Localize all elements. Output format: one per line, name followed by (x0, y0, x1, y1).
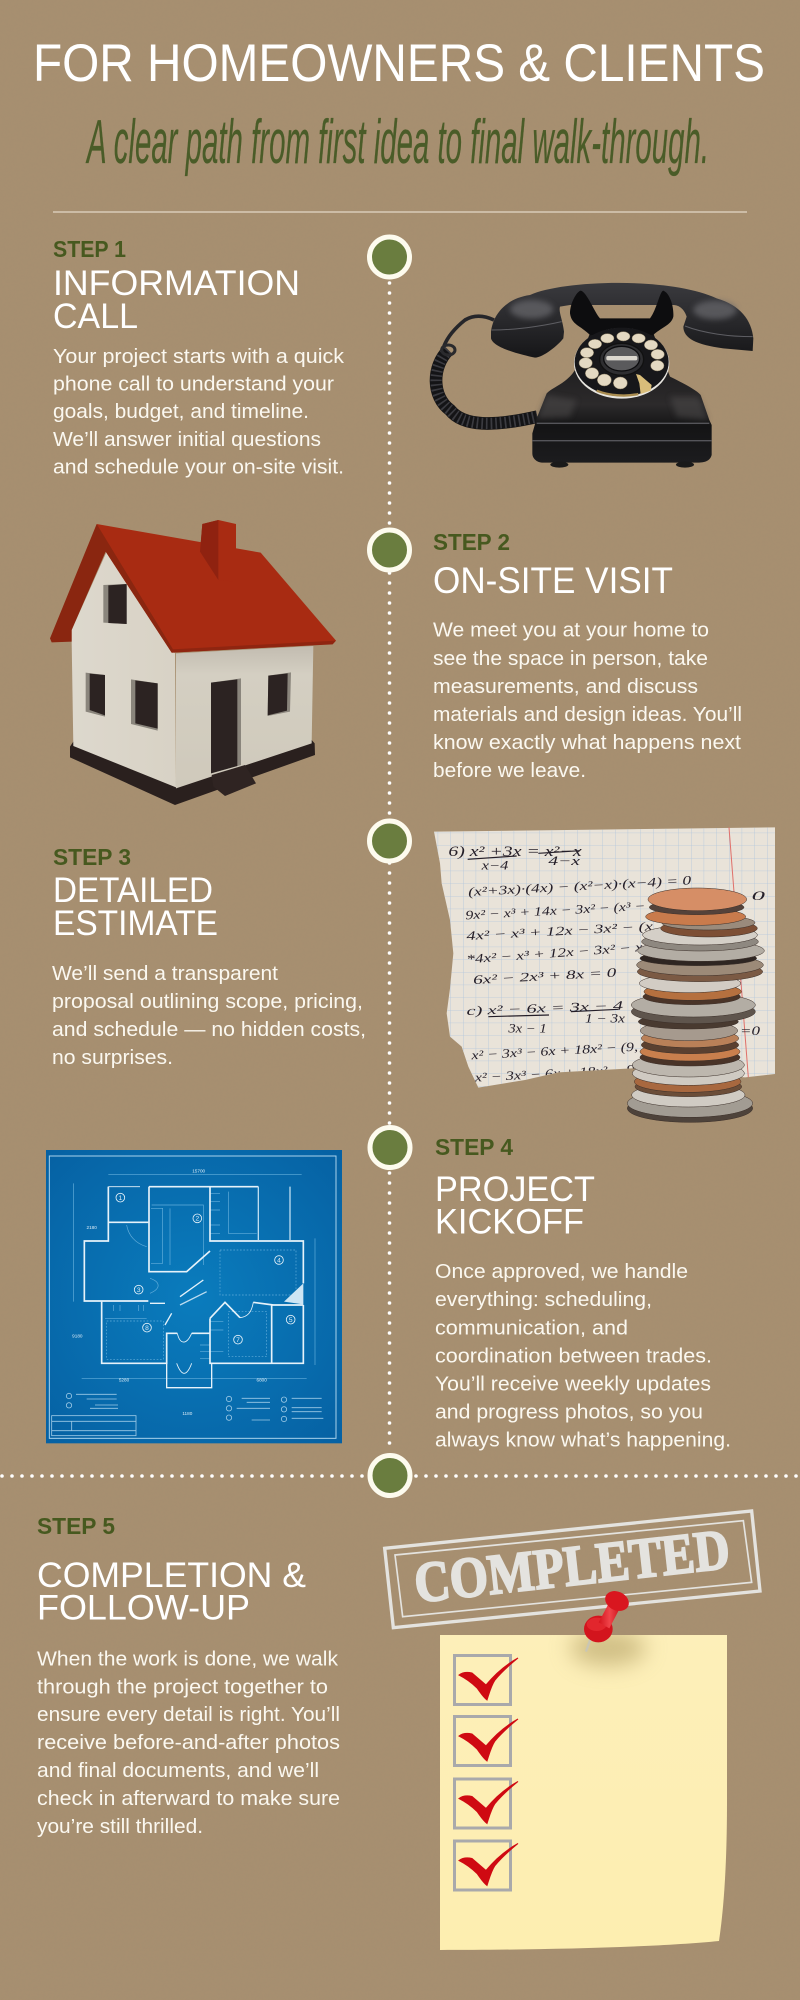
handwritten equations: 6) x² +3x = x²−x (448, 844, 582, 860)
step 2 body: materials and design ideas. You’ll (433, 703, 742, 726)
pin shadow (570, 1630, 646, 1666)
handset (491, 283, 753, 358)
room numbers (118, 1195, 293, 1344)
step 1 body: Your project starts with a quick (53, 345, 345, 368)
step 2 body: know exactly what happens next (433, 731, 741, 754)
handwritten equations: =0 (740, 1024, 761, 1038)
step 2 body: before we leave. (433, 759, 586, 782)
torn math paper (434, 827, 775, 1088)
step 1 heading (53, 264, 300, 336)
step 1 body: We’ll answer initial questions (53, 428, 321, 451)
icon: red push pin (584, 1587, 632, 1651)
step 5 body: you’re still thrilled. (37, 1815, 203, 1838)
checkbox 3 (454, 1779, 518, 1828)
dimension labels: 5280 (119, 1378, 130, 1383)
checkbox 2 (454, 1716, 518, 1766)
handwritten equations: 3x − 1 (507, 1022, 547, 1036)
windows and door (86, 584, 291, 796)
step 1 label: STEP 1 (53, 236, 126, 262)
roof (97, 524, 336, 653)
handwritten equations: 4x² − x³ + 12x − 3x² − (x (466, 919, 654, 943)
fine plan details (73, 1174, 315, 1378)
step 3 body: and schedule — no hidden costs, (52, 1018, 366, 1041)
step 4 label: STEP 4 (435, 1134, 513, 1160)
step 3 heading (53, 871, 218, 943)
vertical dotted path (388, 283, 391, 1452)
step 3 body: We’ll send a transparent (52, 962, 278, 985)
dimension labels: 6800 (256, 1378, 267, 1383)
step 2 body: measurements, and discuss (433, 675, 698, 698)
handwritten equations (448, 844, 766, 1085)
step 1 body: phone call to understand your (53, 372, 334, 396)
rotary dial (574, 328, 669, 399)
step 1 heading: INFORMATION (53, 264, 300, 303)
step 5 body: When the work is done, we walk (37, 1648, 339, 1670)
handwritten equations: 1 − 3x (585, 1012, 625, 1026)
note paper (440, 1635, 727, 1950)
step 5 heading: FOLLOW-UP (37, 1588, 250, 1628)
step 5 heading: COMPLETION & (37, 1556, 306, 1595)
step 4 body (435, 1260, 731, 1452)
blueprint sheet (46, 1150, 342, 1443)
step 4 body: always know what’s happening. (435, 1428, 731, 1452)
timeline (2, 237, 798, 1496)
step 4 body: everything: scheduling, (435, 1288, 652, 1311)
step 4 heading: KICKOFF (435, 1202, 584, 1242)
dimension labels (72, 1168, 267, 1416)
handwritten equations: x−4 (480, 858, 509, 872)
step 2 body: We meet you at your home to (433, 618, 709, 642)
room numbers: 8 (145, 1325, 149, 1332)
stamp: completed: COMPLETED (411, 1518, 733, 1615)
step 4 body: and progress photos, so you (435, 1400, 703, 1424)
step 4 heading (435, 1170, 595, 1242)
step 5 body: receive before-and-after photos (37, 1731, 340, 1754)
room numbers: 4 (277, 1257, 281, 1264)
dimension labels: 15700 (192, 1168, 206, 1173)
step 5 heading (37, 1556, 306, 1628)
marker: step 4 (370, 1128, 410, 1168)
step 5 body: check in afterward to make sure (37, 1787, 340, 1810)
step 4 heading: PROJECT (435, 1170, 595, 1209)
marker: step 2 (370, 530, 410, 570)
step 3 label: STEP 3 (53, 844, 131, 870)
cradle (570, 291, 673, 335)
foundation (70, 740, 315, 805)
step 3 body (52, 962, 366, 1069)
room numbers: 1 (118, 1195, 122, 1202)
room numbers: 7 (236, 1337, 240, 1344)
handwritten equations: 0 (752, 889, 766, 903)
room numbers: 2 (195, 1216, 199, 1223)
step 2 body: see the space in person, take (433, 647, 708, 670)
step 5 label: STEP 5 (37, 1513, 115, 1539)
icon: rotary telephone (436, 283, 753, 468)
walls (72, 552, 176, 787)
marker: step 3 (370, 821, 410, 861)
handwritten equations: (x²+3x)·(4x) − (x²−x)·(x−4) = 0 (468, 873, 692, 899)
step 2 heading: ON-SITE VISIT (433, 560, 673, 601)
panel: step 2 text (433, 529, 742, 782)
step 2 body (433, 618, 742, 782)
step 1 body: and schedule your on-site visit. (53, 456, 344, 478)
step 4 body: coordination between trades. (435, 1344, 712, 1368)
step 3 body: proposal outlining scope, pricing, (52, 990, 363, 1013)
handwritten equations: 6x² − 2x³ + 8x = 0 (473, 965, 618, 987)
sticky note checklist (440, 1630, 727, 1950)
panel: step 5 text (37, 1513, 340, 1838)
step 2 label: STEP 2 (433, 529, 510, 555)
marker: step 1 (370, 237, 410, 277)
handwritten equations: 9x² − x³ + 14x − 3x² − (x³ − (465, 899, 646, 922)
dimension labels: 2180 (86, 1225, 97, 1230)
chimney (200, 520, 236, 582)
step 4 body: Once approved, we handle (435, 1260, 688, 1283)
illustration: blueprint floor plan (46, 1150, 342, 1443)
coiled cord (436, 316, 537, 423)
step 1 body (53, 345, 345, 478)
step 5 body: through the project together to (37, 1676, 328, 1698)
dimension labels: 1180 (182, 1411, 193, 1416)
room numbers: 5 (289, 1317, 293, 1324)
handwritten equations: x² − 3x³ − 6x + 18x² − (9, (470, 1040, 638, 1062)
step 3 heading: DETAILED (53, 871, 213, 910)
panel: step 3 text (52, 844, 366, 1069)
handwritten equations: c) x² − 6x = 3x − 4 (466, 998, 624, 1018)
legend and title block (52, 1393, 323, 1436)
horizontal dotted path (2, 1474, 798, 1478)
handwritten equations: 4−x (548, 854, 581, 868)
room number markers (116, 1193, 295, 1344)
marker: step 5 (370, 1456, 410, 1496)
step 1 heading: CALL (53, 297, 138, 336)
room numbers: 3 (137, 1287, 141, 1294)
panel: step 1 text (53, 236, 345, 478)
step 4 body: communication, and (435, 1316, 628, 1340)
checkbox 4 (454, 1841, 518, 1890)
handwritten equations: *4x² − x³ + 12x − 3x² − x (466, 940, 644, 966)
step 5 body: ensure every detail is right. You’ll (37, 1703, 340, 1726)
step 1 body: goals, budget, and timeline. (53, 400, 309, 423)
telephone body (532, 333, 712, 463)
step 3 heading: ESTIMATE (53, 904, 218, 943)
step 4 body: You’ll receive weekly updates (435, 1372, 711, 1396)
floor plan walls (84, 1187, 303, 1388)
coin stack (627, 888, 764, 1122)
handwritten equations: x² − 3x³ − 6x + 18x² − 9 (473, 1062, 636, 1085)
dimension labels: 9180 (72, 1334, 83, 1339)
step 5 body (37, 1648, 340, 1838)
step 5 body: and final documents, and we’ll (37, 1759, 319, 1782)
panel: step 4 text (435, 1134, 731, 1452)
step 3 body: no surprises. (52, 1046, 173, 1069)
checkbox 1 (454, 1656, 518, 1704)
icon: house (50, 520, 336, 805)
illustration: math paper and coin stack (434, 827, 775, 1122)
